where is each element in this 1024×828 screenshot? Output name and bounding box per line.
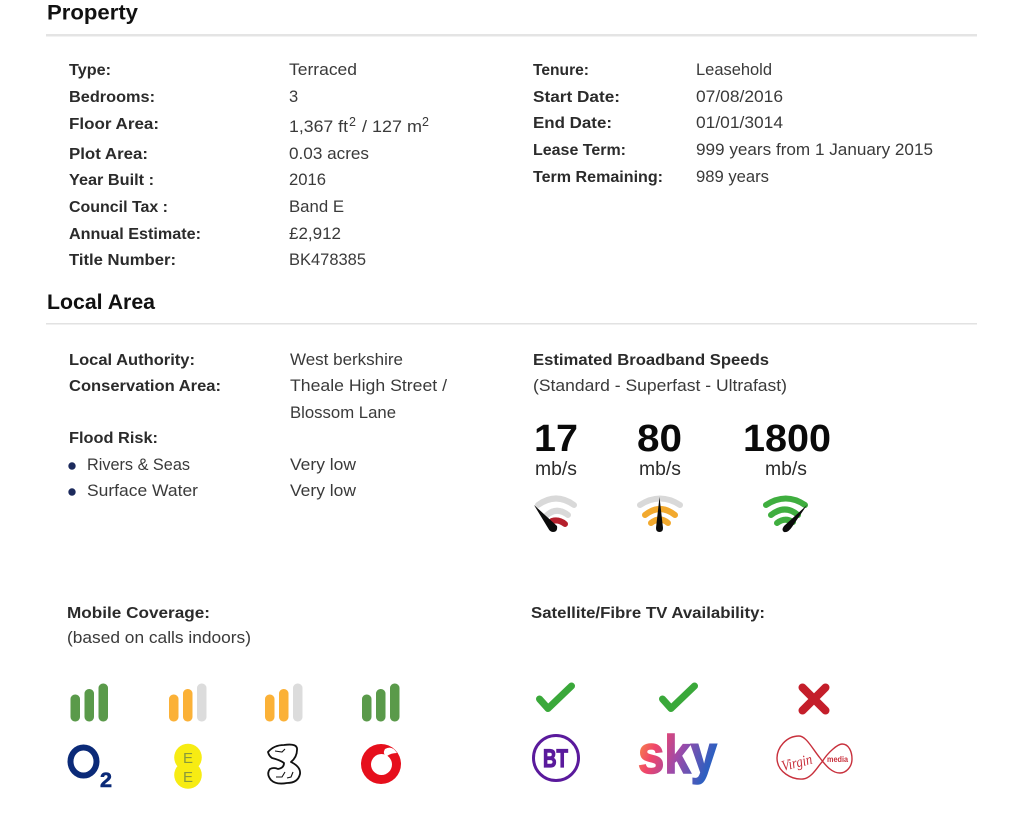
icon: fast speed gauge xyxy=(766,498,807,532)
logo: O2: 2 xyxy=(100,769,112,792)
panel: local authority and flood risk: Blossom Lane xyxy=(290,404,396,422)
speed: 17 mb/s: 17 xyxy=(534,418,578,460)
speed: 1800 mb/s: mb/s xyxy=(765,459,807,480)
panel: tenure details right: 01/01/3014 xyxy=(696,114,783,132)
panel: property details left: Bedrooms: xyxy=(69,89,155,106)
panel: property details left: / 127 m xyxy=(362,118,422,136)
panel: tenure details right: 999 years from 1 January 2015 xyxy=(696,141,933,159)
panel: property details left: £2,912 xyxy=(289,225,341,243)
panel: local authority and flood risk: Surface Water xyxy=(87,482,199,500)
panel: local authority and flood risk xyxy=(68,351,447,500)
icon: Virgin unavailable cross xyxy=(802,688,826,710)
panel: property details left: 1,367 ft xyxy=(289,118,348,136)
heading: broadband speeds xyxy=(533,352,787,395)
panel: property details left: Terraced xyxy=(289,61,357,79)
panel: property details left: Council Tax : xyxy=(69,199,168,216)
icon: medium speed gauge xyxy=(640,497,680,532)
panel: local authority and flood risk: Theale High Street / xyxy=(290,377,447,395)
panel: property details left: Title Number: xyxy=(69,252,176,269)
panel: property details left xyxy=(69,61,429,269)
heading: broadband speeds: Estimated Broadband Speeds xyxy=(533,352,769,369)
speed: 1800 mb/s: 1800 xyxy=(743,418,831,460)
speed: 80 mb/s xyxy=(637,418,682,480)
logo: O2 xyxy=(70,748,112,792)
panel: local authority and flood risk: Local Authority: xyxy=(69,352,195,369)
heading: broadband speeds: (Standard - Superfast - Ultrafast) xyxy=(533,377,787,395)
logo: Virgin Media: Virgin xyxy=(780,752,814,775)
heading: mobile coverage xyxy=(67,605,251,647)
logo: EE: E xyxy=(183,750,193,767)
panel: property details left: 3 xyxy=(289,88,298,106)
panel: local authority and flood risk: Conservation Area: xyxy=(69,378,221,395)
panel: local authority and flood risk: Flood Risk: xyxy=(69,430,158,447)
speed: 80 mb/s: 80 xyxy=(637,418,682,460)
icon: Vodafone signal bars xyxy=(362,684,400,722)
panel: property details left: 0.03 acres xyxy=(289,145,369,163)
panel: property details left: Plot Area: xyxy=(69,146,148,163)
logo: Vodafone xyxy=(361,744,401,784)
panel: tenure details right: End Date: xyxy=(533,115,612,132)
icon: EE signal bars xyxy=(169,684,206,722)
panel: property details left: Annual Estimate: xyxy=(69,226,201,243)
logo: BT: BT xyxy=(543,745,568,773)
panel: tenure details right: Start Date: xyxy=(533,89,620,106)
logo: Sky: sky xyxy=(638,725,717,785)
icon: Sky available tick xyxy=(662,686,694,708)
panel: local authority and flood risk: Very low xyxy=(290,482,356,500)
panel: tenure details right: Term Remaining: xyxy=(533,169,663,186)
panel: tenure details right: 07/08/2016 xyxy=(696,88,783,106)
panel: tenure details right: Lease Term: xyxy=(533,142,626,159)
panel: property details left: Band E xyxy=(289,198,344,216)
heading: Property: Property xyxy=(47,0,138,24)
icon: slow speed gauge xyxy=(534,498,574,532)
panel: property details left: 2016 xyxy=(289,171,326,189)
panel: local authority and flood risk: Rivers & Seas xyxy=(87,456,190,474)
panel: local authority and flood risk: Very low xyxy=(290,456,356,474)
icon: BT available tick xyxy=(540,686,572,708)
logo: Virgin Media: media xyxy=(827,755,848,764)
panel: tenure details right xyxy=(533,61,933,186)
speed: 1800 mb/s xyxy=(743,418,831,480)
icon: O2 signal bars xyxy=(70,684,108,722)
panel: property details left: BK478385 xyxy=(289,251,366,269)
panel: local authority and flood risk: West berkshire xyxy=(290,351,403,369)
logo: Three xyxy=(268,745,300,784)
speed: 17 mb/s: mb/s xyxy=(535,459,577,480)
heading: mobile coverage: Mobile Coverage: xyxy=(67,605,210,622)
heading: mobile coverage: (based on calls indoors) xyxy=(67,629,251,647)
panel: property details left: 2 xyxy=(349,115,356,129)
speed: 80 mb/s: mb/s xyxy=(639,459,681,480)
heading: Local Area: Local Area xyxy=(47,290,156,314)
panel: property details left: Type: xyxy=(69,62,111,79)
logo: EE xyxy=(174,744,202,789)
panel: property details left: Year Built : xyxy=(69,172,154,189)
panel: tenure details right: Tenure: xyxy=(533,62,589,79)
speed: 17 mb/s xyxy=(534,418,578,480)
logo: EE: E xyxy=(183,769,193,786)
panel: tenure details right: Leasehold xyxy=(696,61,772,79)
panel: property details left: Floor Area: xyxy=(69,116,159,133)
logo: BT xyxy=(534,736,578,780)
heading: TV availability: Satellite/Fibre TV Availability: xyxy=(531,605,765,622)
panel: tenure details right: 989 years xyxy=(696,168,769,186)
icon: Three signal bars xyxy=(265,684,302,722)
panel: property details left: 2 xyxy=(422,115,429,129)
logo: Virgin Media xyxy=(777,736,852,779)
